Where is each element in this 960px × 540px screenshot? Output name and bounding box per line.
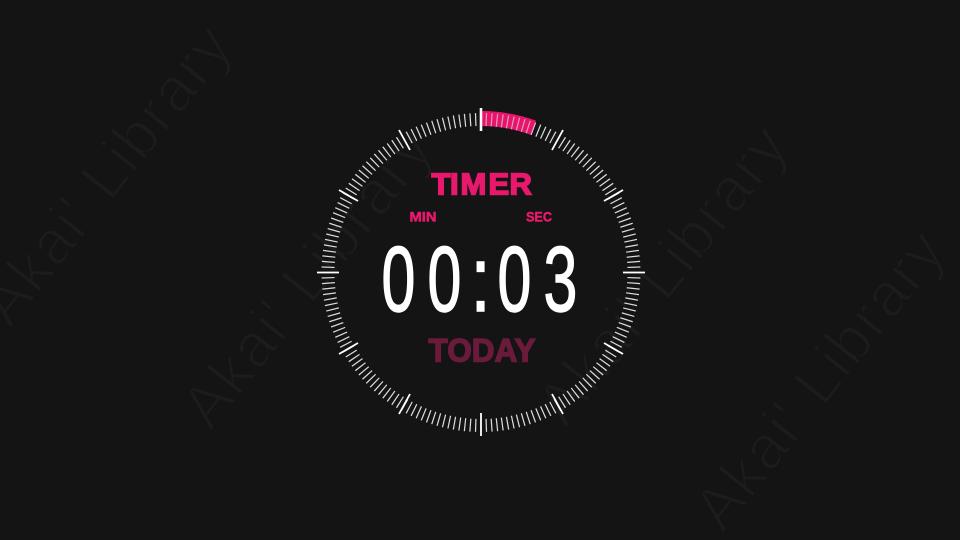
time readout: 0 xyxy=(382,227,415,331)
heading: TIMER: TIMER xyxy=(432,166,532,201)
dial major ticks xyxy=(317,108,645,436)
time readout: 0 xyxy=(428,227,461,331)
heading: TODAY: TODAY xyxy=(428,332,536,368)
time readout: 3 xyxy=(544,227,577,331)
time readout: : xyxy=(470,227,491,331)
watermarks: Akai' Library xyxy=(523,111,803,438)
time readout: 0 xyxy=(498,227,531,331)
watermarks: Akai' Library xyxy=(680,216,960,540)
time readout xyxy=(382,227,577,331)
label: MIN: MIN xyxy=(410,210,436,225)
dial minor ticks xyxy=(328,120,634,426)
progress arc tint over ticks xyxy=(481,118,534,128)
watermarks: Akai' Library xyxy=(168,114,448,441)
progress arc: pink xyxy=(481,118,534,128)
label: SEC: SEC xyxy=(526,210,552,225)
